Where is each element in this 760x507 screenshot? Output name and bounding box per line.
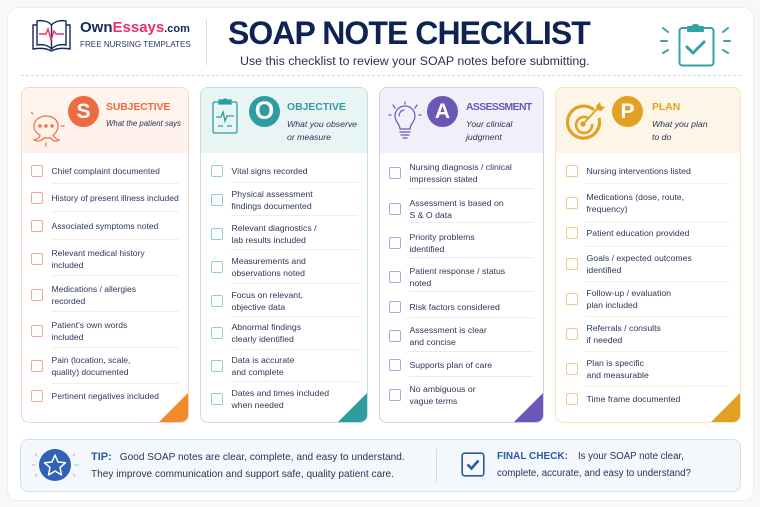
icon: checked box xyxy=(461,452,485,477)
item: when needed xyxy=(232,400,284,410)
title: SOAP NOTE CHECKLIST xyxy=(228,15,590,51)
letter badge P: P xyxy=(620,100,634,123)
item: observations noted xyxy=(232,268,305,278)
corner accent xyxy=(159,393,188,422)
brand name: OwnEssays.com xyxy=(80,19,190,36)
item xyxy=(31,355,130,377)
icon: target with arrow xyxy=(566,102,605,140)
item: Pertinent negatives included xyxy=(52,391,159,401)
item: if needed xyxy=(586,335,622,345)
item: vague terms xyxy=(410,396,457,406)
tip text: They improve communication and support safe, quality patient care. xyxy=(91,468,394,480)
item: Priority problems xyxy=(410,232,475,242)
item: and measurable xyxy=(586,370,649,380)
item xyxy=(31,248,145,270)
corner accent xyxy=(711,393,740,422)
item xyxy=(566,227,689,239)
item: and concise xyxy=(410,337,456,347)
icon: clipboard with check xyxy=(660,24,731,66)
item: quality) documented xyxy=(52,367,128,377)
description: judgment xyxy=(466,132,502,142)
icon: clipboard with heartbeat xyxy=(212,98,238,134)
item: Referrals / consults xyxy=(586,323,661,333)
letter badge O xyxy=(249,96,280,127)
item: and complete xyxy=(232,367,284,377)
heading: ASSESSMENT xyxy=(466,102,532,113)
panel header: subjective xyxy=(22,88,188,153)
item xyxy=(211,256,306,278)
item: Assessment is clear xyxy=(410,325,487,335)
subtitle: Use this checklist to review your SOAP notes before submitting. xyxy=(240,54,590,68)
description: What you plan xyxy=(652,119,708,129)
item xyxy=(566,165,691,177)
item xyxy=(389,162,512,184)
item: objective data xyxy=(232,302,285,312)
item xyxy=(31,220,158,232)
item: included xyxy=(52,260,83,270)
panel: plan xyxy=(555,87,741,423)
item xyxy=(566,393,680,405)
panel header: objective xyxy=(201,88,367,153)
icon: star badge xyxy=(31,446,79,484)
item: Patient response / status xyxy=(410,266,505,276)
heading: SUBJECTIVE xyxy=(106,102,170,113)
heading: PLAN xyxy=(652,102,680,113)
item xyxy=(211,290,303,312)
letter badge P xyxy=(612,96,643,127)
item: Follow-up / evaluation xyxy=(586,288,671,298)
item xyxy=(566,357,649,381)
item: Relevant diagnostics / xyxy=(232,223,316,233)
letter badge A xyxy=(427,96,458,127)
item: Medications / allergies xyxy=(52,284,136,294)
item: Measurements and xyxy=(232,256,306,266)
item xyxy=(211,165,308,177)
item: Vital signs recorded xyxy=(232,166,308,176)
item: Dates and times included xyxy=(232,388,329,398)
item xyxy=(566,192,684,214)
item: findings documented xyxy=(232,201,312,211)
item: Medications (dose, route, xyxy=(586,192,684,202)
item: No ambiguous or xyxy=(410,384,476,394)
item: S & O data xyxy=(410,210,452,220)
item: frequency) xyxy=(586,204,628,214)
panel header: assessment xyxy=(380,88,543,153)
description xyxy=(465,119,512,142)
corner accent xyxy=(514,393,543,422)
item xyxy=(566,253,692,275)
item xyxy=(389,232,475,254)
letter badge O: O xyxy=(255,97,274,125)
corner accent xyxy=(338,393,367,422)
letter badge S xyxy=(68,96,99,127)
item: Plan is specific xyxy=(586,358,644,368)
item xyxy=(389,325,487,347)
panel: subjective xyxy=(21,87,189,423)
item xyxy=(389,266,505,288)
item xyxy=(31,390,159,402)
item xyxy=(211,388,329,410)
item: Time frame documented xyxy=(586,394,680,404)
description: to do xyxy=(652,132,671,142)
item xyxy=(31,284,136,306)
item xyxy=(211,322,301,344)
item: included xyxy=(52,332,83,342)
tip text xyxy=(91,449,405,483)
brand tagline: FREE NURSING TEMPLATES xyxy=(80,40,191,49)
final check text: complete, accurate, and easy to understand? xyxy=(497,468,691,478)
item xyxy=(211,223,316,245)
item: Patient's own words xyxy=(52,320,127,330)
item xyxy=(211,189,313,211)
item: Assessment is based on xyxy=(410,198,504,208)
letter badge A: A xyxy=(435,100,450,123)
panel: objective xyxy=(200,87,368,423)
item xyxy=(211,355,294,377)
description xyxy=(652,119,708,142)
panel: tip and final check xyxy=(20,439,741,492)
item: lab results included xyxy=(232,235,306,245)
item: Supports plan of care xyxy=(410,360,492,370)
item xyxy=(389,198,504,220)
item: Goals / expected outcomes xyxy=(586,253,692,263)
item xyxy=(566,288,671,310)
letter badge S: S xyxy=(76,100,90,123)
item: Relevant medical history xyxy=(52,248,145,258)
item: Patient education provided xyxy=(586,228,689,238)
item: Focus on relevant, xyxy=(232,290,303,300)
item: Nursing interventions listed xyxy=(586,166,691,176)
heading: OBJECTIVE xyxy=(287,102,346,113)
item xyxy=(389,301,500,313)
logo: OwnEssays xyxy=(32,19,191,52)
panel header: plan xyxy=(556,88,740,153)
description: or measure xyxy=(287,132,331,142)
item: Physical assessment xyxy=(232,189,313,199)
item: Risk factors considered xyxy=(410,302,500,312)
item: identified xyxy=(586,265,621,275)
final check text: FINAL CHECK: Is your SOAP note clear, xyxy=(497,451,684,462)
item: clearly identified xyxy=(232,334,294,344)
item xyxy=(566,322,661,346)
item: plan included xyxy=(586,300,638,310)
panel: assessment xyxy=(379,87,544,423)
final check text xyxy=(497,449,691,482)
item: History of present illness included xyxy=(52,193,179,203)
icon: open book with heartbeat xyxy=(32,20,71,52)
description: What the patient says xyxy=(106,119,181,128)
item: impression stated xyxy=(410,174,478,184)
item xyxy=(389,359,492,371)
item: Nursing diagnosis / clinical xyxy=(410,162,512,172)
tip text: TIP: Good SOAP notes are clear, complete, and easy to understand. xyxy=(91,451,405,463)
item: recorded xyxy=(52,296,85,306)
description: Your clinical xyxy=(466,119,512,129)
item xyxy=(389,384,476,406)
item: Pain (location, scale, xyxy=(52,355,130,365)
item: Chief complaint documented xyxy=(52,166,160,176)
description xyxy=(287,119,357,142)
icon: speech bubble xyxy=(31,111,65,147)
item: Associated symptoms noted xyxy=(52,221,158,231)
description: What you observe xyxy=(287,119,357,129)
item: noted xyxy=(410,278,431,288)
item: Data is accurate xyxy=(232,355,294,365)
item xyxy=(31,320,127,342)
item: Abnormal findings xyxy=(232,322,301,332)
icon: light bulb xyxy=(388,101,422,139)
item: identified xyxy=(410,244,444,254)
